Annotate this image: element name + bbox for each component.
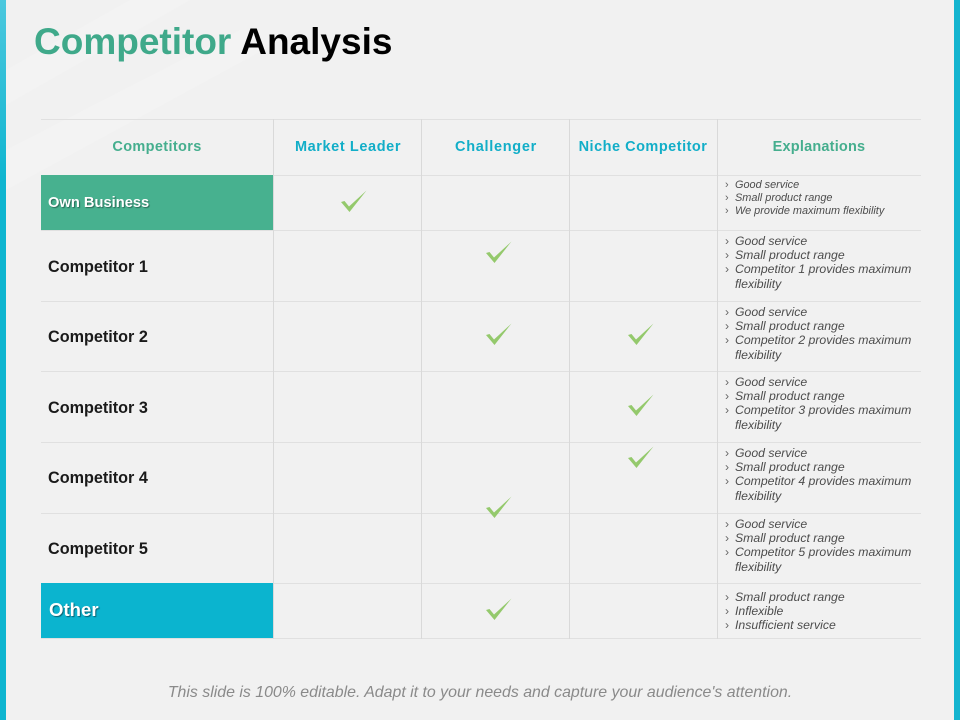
row label: Competitor 1: Competitor 1 bbox=[48, 258, 148, 276]
explanation: Other: Small product range bbox=[735, 590, 845, 604]
explanation: Competitor 5: Good service bbox=[735, 517, 807, 531]
explanation: Own Business: We provide maximum flexibility bbox=[735, 205, 884, 217]
explanation: Competitor 1: Good service bbox=[735, 234, 807, 248]
explanation: Competitor 1: Competitor 1 provides maximum bbox=[735, 262, 911, 276]
check: Other, Challenger bbox=[486, 598, 512, 620]
right accent bar bbox=[954, 0, 960, 720]
explanation: Competitor 5: Competitor 5 provides maximum bbox=[735, 545, 911, 559]
explanation: Other: Insufficient service bbox=[735, 618, 836, 632]
explanation: Other bbox=[726, 590, 845, 632]
explanation: Competitor 4 bbox=[726, 446, 911, 503]
explanation: Competitor 1: Small product range bbox=[735, 248, 845, 262]
explanation: Own Business: Small product range bbox=[735, 192, 832, 204]
explanation: Own Business: Good service bbox=[735, 179, 799, 191]
title: Competitor Analysis bbox=[34, 21, 392, 62]
row label: Competitor 4: Competitor 4 bbox=[48, 469, 148, 487]
explanation: Competitor 3 bbox=[726, 375, 911, 432]
footer note: This slide is 100% editable. Adapt it to your needs and capture your audience's attention. bbox=[168, 684, 792, 701]
check: Competitor 3, Niche Competitor bbox=[628, 394, 654, 416]
explanation: Competitor 1 bbox=[726, 234, 911, 291]
row label: Other: Other bbox=[49, 599, 99, 620]
row label: Competitor 2: Competitor 2 bbox=[48, 328, 148, 346]
header: Competitors: Competitors bbox=[112, 139, 202, 155]
explanation: Competitor 3: Small product range bbox=[735, 389, 845, 403]
explanation: Competitor 5: flexibility bbox=[735, 560, 781, 574]
check: Own Business, Market Leader bbox=[341, 190, 366, 212]
explanation: Competitor 2: Good service bbox=[735, 305, 807, 319]
explanation: Competitor 4: Small product range bbox=[735, 460, 845, 474]
explanation: Competitor 1: flexibility bbox=[735, 277, 781, 291]
competitor table bbox=[41, 119, 921, 639]
header: Niche Competitor: Niche Competitor bbox=[579, 139, 707, 155]
row label: Competitor 3: Competitor 3 bbox=[48, 399, 148, 417]
explanation: Competitor 2: Small product range bbox=[735, 319, 845, 333]
explanation: Competitor 5: Small product range bbox=[735, 531, 845, 545]
check: Competitor 4, Niche Competitor bbox=[628, 446, 654, 468]
check: Competitor 1, Challenger bbox=[486, 242, 512, 263]
check: Competitor 2, Niche Competitor bbox=[628, 324, 654, 345]
explanation: Own Business bbox=[726, 179, 885, 217]
explanation: Competitor 2: flexibility bbox=[735, 348, 781, 362]
explanation: Competitor 3: Good service bbox=[735, 375, 807, 389]
row label: Own Business: Own Business bbox=[48, 195, 149, 211]
explanation: Competitor 5 bbox=[726, 517, 911, 574]
explanation: Competitor 2: Competitor 2 provides maximum bbox=[735, 333, 911, 347]
row label: Competitor 5: Competitor 5 bbox=[48, 540, 148, 558]
explanation: Other: Inflexible bbox=[735, 604, 783, 618]
explanation: Competitor 4: Competitor 4 provides maximum bbox=[735, 474, 911, 488]
row label: Own Business bbox=[41, 175, 273, 230]
explanation: Competitor 2 bbox=[726, 305, 911, 362]
check: Competitor 2, Challenger bbox=[486, 324, 512, 345]
check: Competitor 5, Challenger bbox=[486, 496, 512, 518]
header: Challenger: Challenger bbox=[455, 139, 537, 155]
left accent bar bbox=[0, 0, 6, 720]
row label: Other bbox=[41, 583, 273, 638]
header: Explanations: Explanations bbox=[773, 139, 865, 155]
explanation: Competitor 3: Competitor 3 provides maximum bbox=[735, 403, 911, 417]
explanation: Competitor 3: flexibility bbox=[735, 418, 781, 432]
explanation: Competitor 4: flexibility bbox=[735, 489, 781, 503]
header: Market Leader: Market Leader bbox=[295, 139, 401, 155]
explanation: Competitor 4: Good service bbox=[735, 446, 807, 460]
background streaks bbox=[0, 0, 400, 200]
